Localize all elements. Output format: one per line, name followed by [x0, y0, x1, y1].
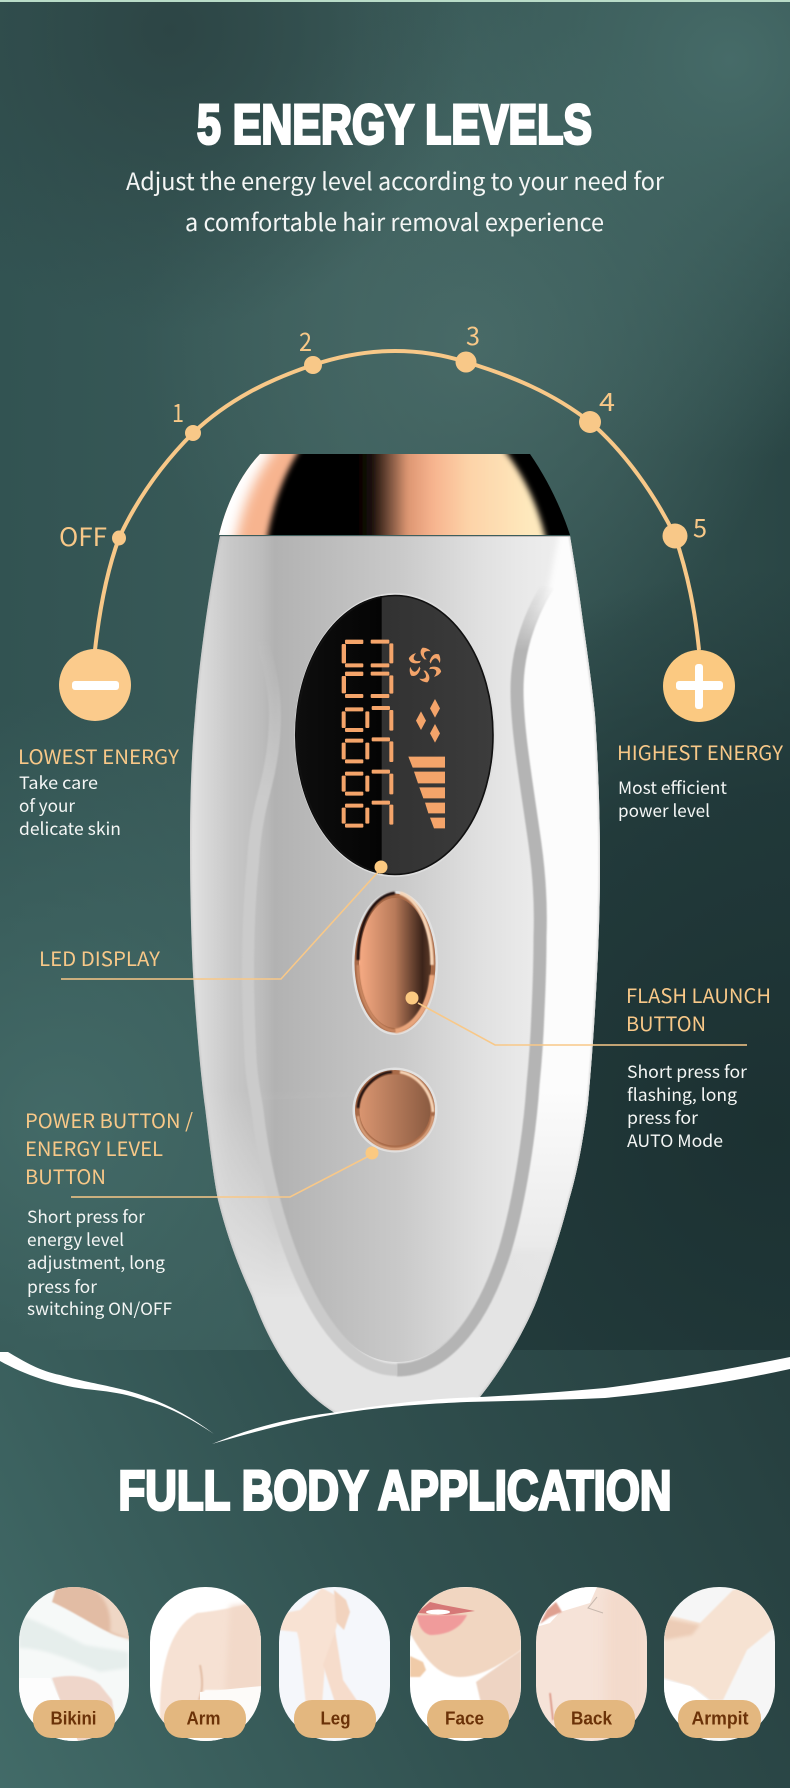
callout: power button: energy level: [27, 1226, 124, 1251]
lowest energy text: of your: [19, 792, 75, 817]
label: face: Face: [445, 1708, 484, 1728]
white swoosh divider: [0, 1352, 790, 1444]
left groove: [244, 694, 397, 1376]
label: bikini: Bikini: [50, 1708, 96, 1728]
body edge shade: [190, 536, 600, 1413]
callout: flash launch button: FLASH LAUNCH: [626, 980, 771, 1009]
energy level arc: 2: [299, 323, 312, 359]
device: [180, 440, 610, 1430]
label: leg: [294, 1700, 376, 1738]
energy level arc: 3: [466, 317, 480, 353]
lowest energy text: Take care: [19, 769, 98, 794]
subtitle: a comfortable hair removal experience: [185, 203, 604, 238]
panel: back: [536, 1587, 647, 1741]
flash launch button: [352, 891, 438, 1035]
callout: power button: POWER BUTTON /: [25, 1105, 193, 1134]
energy level arc: OFF: [59, 518, 107, 554]
callout: power button: switching ON/OFF: [27, 1295, 172, 1320]
right groove: [397, 585, 548, 1370]
led display: [294, 593, 496, 877]
callout: flash launch button: AUTO Mode: [627, 1127, 723, 1152]
highest energy text: [617, 737, 783, 822]
callout: flash launch button: [406, 980, 771, 1152]
energy level arc: 5: [693, 509, 707, 545]
callout: flash launch button: flashing, long: [627, 1081, 737, 1106]
device body: [180, 530, 610, 1430]
callout: power button: BUTTON: [25, 1161, 106, 1190]
callout: power button: press for: [27, 1273, 97, 1298]
label: bikini: [33, 1700, 115, 1738]
highest energy text: HIGHEST ENERGY: [617, 737, 783, 766]
icon: fan: [407, 648, 443, 682]
panel: leg: [279, 1587, 390, 1741]
energy level arc: 4: [599, 383, 615, 419]
highest energy text: power level: [618, 797, 710, 822]
callout: flash launch button: BUTTON: [626, 1008, 706, 1037]
label: arm: [164, 1700, 246, 1738]
power button: [352, 1068, 438, 1152]
white right side: [522, 536, 600, 1251]
label: arm: Arm: [186, 1708, 220, 1728]
icon: minus: [59, 649, 131, 721]
panel: armpit: [664, 1586, 775, 1741]
label: back: Back: [571, 1708, 613, 1728]
lower rim: [208, 1137, 577, 1412]
callout: power button: [25, 1105, 378, 1320]
lowest energy text: [18, 741, 179, 840]
label: back: [554, 1700, 635, 1738]
callout: led display: LED DISPLAY: [39, 943, 160, 972]
panel: arm: [150, 1587, 262, 1741]
energy bars: [408, 757, 445, 828]
callout: flash launch button: Short press for: [627, 1058, 747, 1083]
label: armpit: [678, 1700, 761, 1738]
lowest energy text: delicate skin: [19, 815, 121, 840]
callout: flash launch button: press for: [627, 1104, 698, 1129]
label: leg: Leg: [320, 1708, 350, 1728]
device head: [219, 454, 570, 535]
callout: power button: ENERGY LEVEL: [25, 1133, 163, 1162]
subtitle: [126, 162, 665, 238]
energy level arc: 1: [172, 394, 184, 430]
subtitle: Adjust the energy level according to your need for: [126, 162, 665, 197]
callout: power button: Short press for: [27, 1203, 145, 1228]
display digits: [342, 640, 393, 828]
highest energy text: Most efficient: [618, 774, 728, 799]
panel: bikini: [19, 1583, 135, 1741]
panel: face: [410, 1587, 521, 1741]
icon: diamonds: [416, 699, 440, 743]
callout: power button: adjustment, long: [27, 1249, 165, 1274]
label: face: [427, 1700, 509, 1738]
callout: led display: [39, 860, 388, 979]
icon: plus: [663, 650, 735, 722]
energy level arc: [59, 317, 707, 650]
label: armpit: Armpit: [692, 1708, 748, 1728]
lowest energy text: LOWEST ENERGY: [18, 741, 179, 770]
title: 5 energy levels: 5 ENERGY LEVELS: [197, 92, 592, 156]
